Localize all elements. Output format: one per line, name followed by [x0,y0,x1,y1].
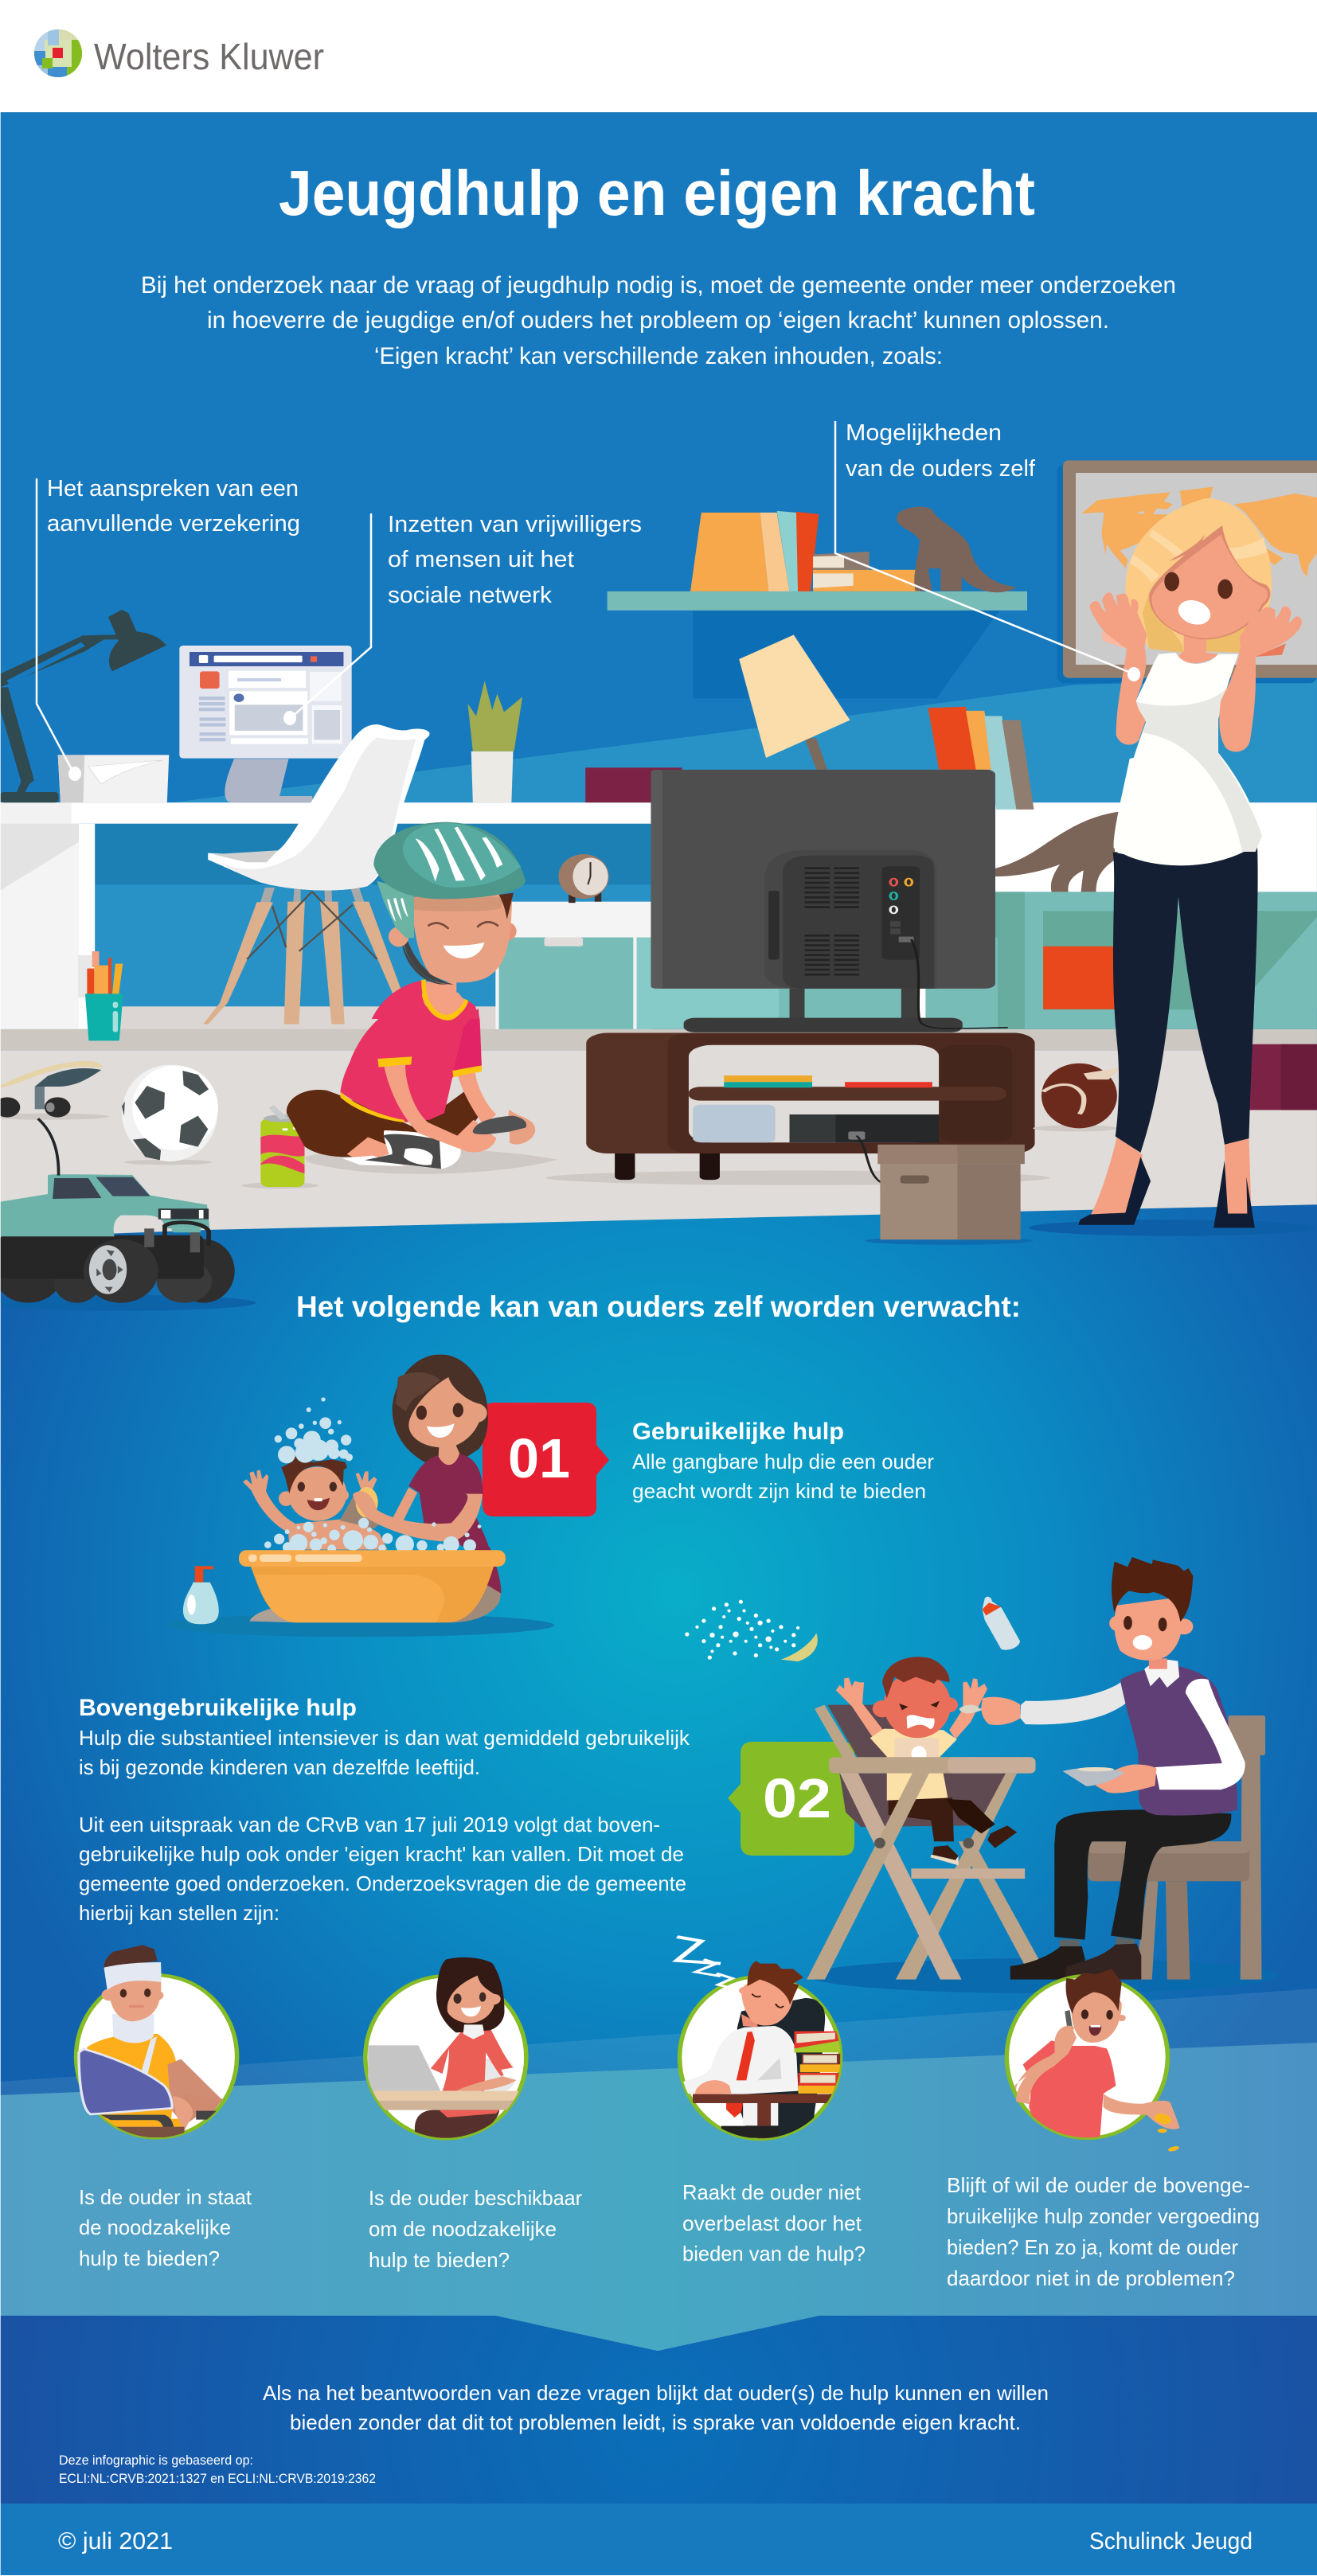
light wedge 2 with chevron [0,2043,1317,2351]
Bovengebruikelijke hulp text: gebruikelijke hulp ook onder 'eigen kracht' kan vallen. Dit moet de [79,1842,684,1866]
mother bathing child illustration [166,1355,554,1637]
Bovengebruikelijke hulp text: gemeente goed onderzoeken. Onderzoeksvragen die de gemeente [79,1872,686,1895]
woman shirt [1115,653,1262,852]
badge 01 [483,1403,609,1516]
woman upper body [1089,498,1302,852]
thrown food spray [685,1600,818,1661]
bubbles [264,1397,481,1554]
Bovengebruikelijke hulp text: Bovengebruikelijke hulp [79,1695,357,1721]
annotation text right [846,420,1036,482]
TV back [651,770,1008,1032]
callout: Het aanspreken [37,478,81,781]
annotation text left: Het aanspreken van een [47,476,299,502]
desk lamp [0,610,166,802]
toy truck [0,1118,256,1311]
woman neck and face [1149,525,1270,663]
conclusion panel: bieden zonder dat dit tot problemen leidt, is sprake van voldoende eigen kracht. [290,2410,1021,2434]
high chair [815,1705,1041,1980]
father's chair [1088,1715,1265,1980]
tub [239,1550,506,1622]
callout: Mogelijkheden [835,421,1140,681]
badge 01: 01 [508,1427,570,1489]
annotation text middle: of mensen uit het [388,547,574,572]
chair [203,724,430,1025]
potted plant [468,681,522,802]
baby [836,1657,1017,1865]
Gebruikelijke hulp text: Gebruikelijke hulp [632,1419,844,1445]
gradient middle section [0,1194,1317,2324]
cabinets [495,892,1317,1029]
mother [393,1355,501,1622]
footer: Schulinck Jeugd [1089,2528,1253,2555]
question 3: overbelast door het [682,2211,862,2235]
bottle [983,1597,1020,1650]
question 4: daardoor niet in de problemen? [947,2266,1235,2290]
intro text: in hoeverre de jeugdige en/of ouders het probleem op ‘eigen kracht’ kunnen oplossen. [207,307,1109,334]
question 1: de noodzakelijke [79,2215,231,2239]
maroon box and table lamp and books [585,634,1034,810]
Gebruikelijke hulp text: geacht wordt zijn kind te bieden [632,1479,926,1503]
Bovengebruikelijke hulp text: Uit een uitspraak van de CRvB van 17 juli 2019 volgt dat boven- [79,1813,660,1836]
footer [0,2504,1317,2575]
callout lines and dots [37,421,1140,781]
intro text [141,272,1176,369]
question 3: bieden van de hulp? [682,2242,866,2266]
icon: Wolters Kluwer globe [34,29,82,77]
map continents [1081,487,1317,577]
Bovengebruikelijke hulp text [79,1695,690,1925]
badge 02 [728,1742,854,1856]
icon: sleeping Zzz [677,1937,733,1987]
footer: © juli 2021 [58,2528,173,2555]
Bovengebruikelijke hulp text: is bij gezonde kinderen van dezelfde leeftijd. [79,1755,480,1779]
clock [558,854,609,903]
floor shadow under chairs [808,1958,1278,1993]
question 2: Is de ouder beschikbaar [369,2186,582,2210]
boy playing with controller [287,822,557,1174]
question 4: Blijft of wil de ouder de bovenge- [947,2173,1250,2197]
father [981,1557,1245,1980]
soccer ball [122,1065,218,1165]
conclusion panel [0,2316,1317,2504]
question 3 [682,2180,866,2266]
upper blue background [0,112,1317,1274]
cardboard box [865,1145,1033,1245]
room scene background [0,611,1317,1238]
question 2 [369,2186,582,2272]
badge 02: 02 [763,1767,831,1829]
TV cabinet and contents [546,1032,1049,1185]
american football [1033,1044,1317,1131]
boy legs, shirt, arms [287,993,535,1169]
annotation text left: aanvullende verzekering [47,511,300,537]
circle 2: parent with laptop [365,1957,526,2140]
chair tray and legs front [807,1757,1036,1980]
source note: Deze infographic is gebaseerd op: [59,2453,253,2468]
pencil holder [78,951,123,1040]
annotation text right: Mogelijkheden [846,420,1002,446]
question 1: Is de ouder in staat [79,2185,252,2209]
annotation text right: van de ouders zelf [846,456,1036,482]
Bovengebruikelijke hulp text: Hulp die substantieel intensiever is dan wat gemiddeld gebruikelijk [79,1726,690,1750]
icon: dinosaur on shelf [897,507,1016,592]
bath shadow [166,1614,554,1637]
circle 3: overloaded sleeping parent [680,1961,841,2141]
question 1: hulp te bieden? [79,2246,220,2270]
logo wordmark: Wolters Kluwer [94,36,324,77]
world map frame [1057,460,1317,683]
soap bottle [183,1566,219,1624]
source note [59,2453,376,2486]
paper stack [58,755,169,802]
skateboard [0,1061,110,1120]
annotation text middle: Inzetten van vrijwilligers [388,512,642,537]
question 4: bruikelijke hulp zonder vergoeding [947,2204,1260,2228]
annotation text left [47,476,300,537]
section heading: Het volgende kan van ouders zelf worden verwacht: [296,1290,1021,1323]
Bovengebruikelijke hulp text: hierbij kan stellen zijn: [79,1901,279,1925]
annotation text middle [388,512,642,608]
woman arms and hands [1089,592,1302,751]
boy head with helmet [372,822,526,1020]
drink can [242,1105,319,1188]
shelf with books and dinosaur [608,507,1027,611]
boy shadow [304,1148,557,1174]
woman lower body [1029,743,1315,1236]
question 2: om de noodzakelijke [369,2217,557,2241]
question 4 [947,2173,1260,2290]
question 2: hulp te bieden? [369,2248,510,2272]
dinosaur behind woman [995,811,1121,892]
callout: Inzetten [283,513,371,725]
Gebruikelijke hulp text [632,1419,934,1503]
light wedge 1 [0,1989,1317,2324]
header band with logo [34,29,323,77]
circle 4: parent on phone with coins [1006,1969,1180,2153]
woman hair [1125,498,1272,653]
computer monitor [179,646,352,802]
source note: ECLI:NL:CRVB:2021:1327 en ECLI:NL:CRVB:2019:2362 [59,2471,376,2486]
father feeding baby illustration [807,1557,1265,1980]
circle 1: injured parent [76,1945,237,2137]
intro text: Bij het onderzoek naar de vraag of jeugdhulp nodig is, moet de gemeente onder meer onderzoeken [141,272,1176,299]
title: Jeugdhulp en eigen kracht [279,158,1035,228]
annotation text middle: sociale netwerk [388,583,553,608]
intro text: ‘Eigen kracht’ kan verschillende zaken inhouden, zoals: [374,343,943,369]
question 3: Raakt de ouder niet [682,2180,862,2204]
question 1 [79,2185,252,2270]
child [243,1455,483,1550]
conclusion panel: Als na het beantwoorden van deze vragen blijkt dat ouder(s) de hulp kunnen en willen [263,2381,1049,2405]
question 4: bieden? En zo ja, komt de ouder [947,2235,1238,2259]
Gebruikelijke hulp text: Alle gangbare hulp die een ouder [632,1450,934,1473]
